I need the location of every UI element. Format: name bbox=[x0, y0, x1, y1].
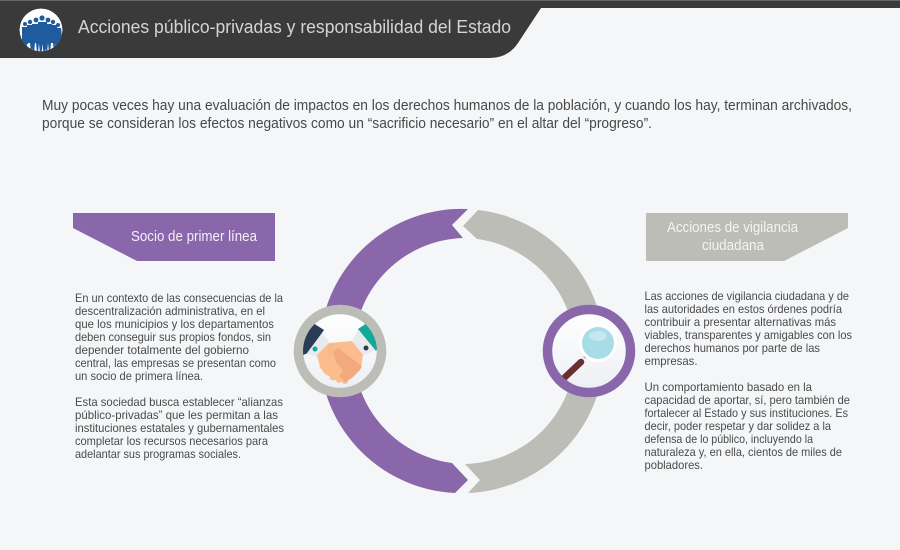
left body text: público-privadas” que les permitan a las bbox=[75, 408, 278, 422]
right body text: Un comportamiento basado en la bbox=[644, 380, 812, 394]
left body text bbox=[75, 291, 284, 461]
left body text: adelantar sus programas sociales. bbox=[75, 447, 241, 461]
left body text: En un contexto de las consecuencias de la bbox=[75, 291, 283, 305]
right body text: decir, poder respetar y dar solidez a la bbox=[644, 419, 831, 433]
left body text: que los municipios y los departamentos bbox=[75, 317, 274, 331]
right body text: contribuir a presentar alternativas más bbox=[644, 315, 836, 329]
left body text: Esta sociedad busca establecer “alianzas bbox=[75, 395, 283, 409]
intro text: Muy pocas veces hay una evaluación de impactos en los derechos humanos de la población, y cuando los hay, terminan archivados, bbox=[42, 98, 852, 114]
arc: purple left arrow bbox=[319, 209, 468, 493]
right body text: naturaleza y, en ella, cientos de miles de bbox=[644, 445, 842, 459]
left body text: depender totalmente del gobierno bbox=[75, 343, 249, 357]
right body text: las autoridades en estos órdenes podría bbox=[644, 302, 842, 316]
right body text: defensa de lo público, incluyendo la bbox=[644, 432, 813, 446]
right body text: capacidad de aportar, sí, pero también de bbox=[644, 393, 850, 407]
title: Acciones público-privadas y responsabilidad del Estado bbox=[78, 17, 511, 37]
right body text bbox=[644, 289, 852, 472]
left body text: completar los recursos necesarios para bbox=[75, 434, 268, 448]
icon: crowd logo bbox=[20, 8, 62, 53]
intro text bbox=[42, 98, 852, 132]
header banner bbox=[0, 0, 900, 58]
right body text: Las acciones de vigilancia ciudadana y de bbox=[644, 289, 849, 303]
panel: right heading bbox=[646, 213, 848, 261]
icon: handshake bbox=[298, 310, 382, 392]
right body text: derechos humanos por parte de las bbox=[644, 341, 820, 355]
intro text: porque se consideran los efectos negativos como un “sacrificio necesario” en el altar del “progreso”. bbox=[42, 116, 652, 132]
panel: right heading: Acciones de vigilancia bbox=[667, 220, 799, 236]
left body text: instituciones estatales y gubernamentales bbox=[75, 421, 284, 435]
arc: gray right arrow bbox=[463, 210, 604, 493]
left body text: central, las empresas se presentan como bbox=[75, 356, 276, 370]
panel: right heading: ciudadana bbox=[702, 238, 765, 254]
panel: left heading bbox=[73, 213, 275, 261]
panel: left heading: Socio de primer línea bbox=[131, 229, 258, 245]
right body text: empresas. bbox=[644, 354, 698, 368]
right body text: viables, transparentes y amigables con los bbox=[644, 328, 852, 342]
left body text: un socio de primera línea. bbox=[75, 369, 203, 383]
icon: magnifying glass bbox=[548, 310, 630, 392]
left body text: descentralización administrativa, en el bbox=[75, 304, 265, 318]
left body text: deben conseguir sus propios fondos, sin bbox=[75, 330, 271, 344]
right body text: pobladores. bbox=[644, 458, 703, 472]
right body text: fortalecer al Estado y sus instituciones. Es bbox=[644, 406, 848, 420]
